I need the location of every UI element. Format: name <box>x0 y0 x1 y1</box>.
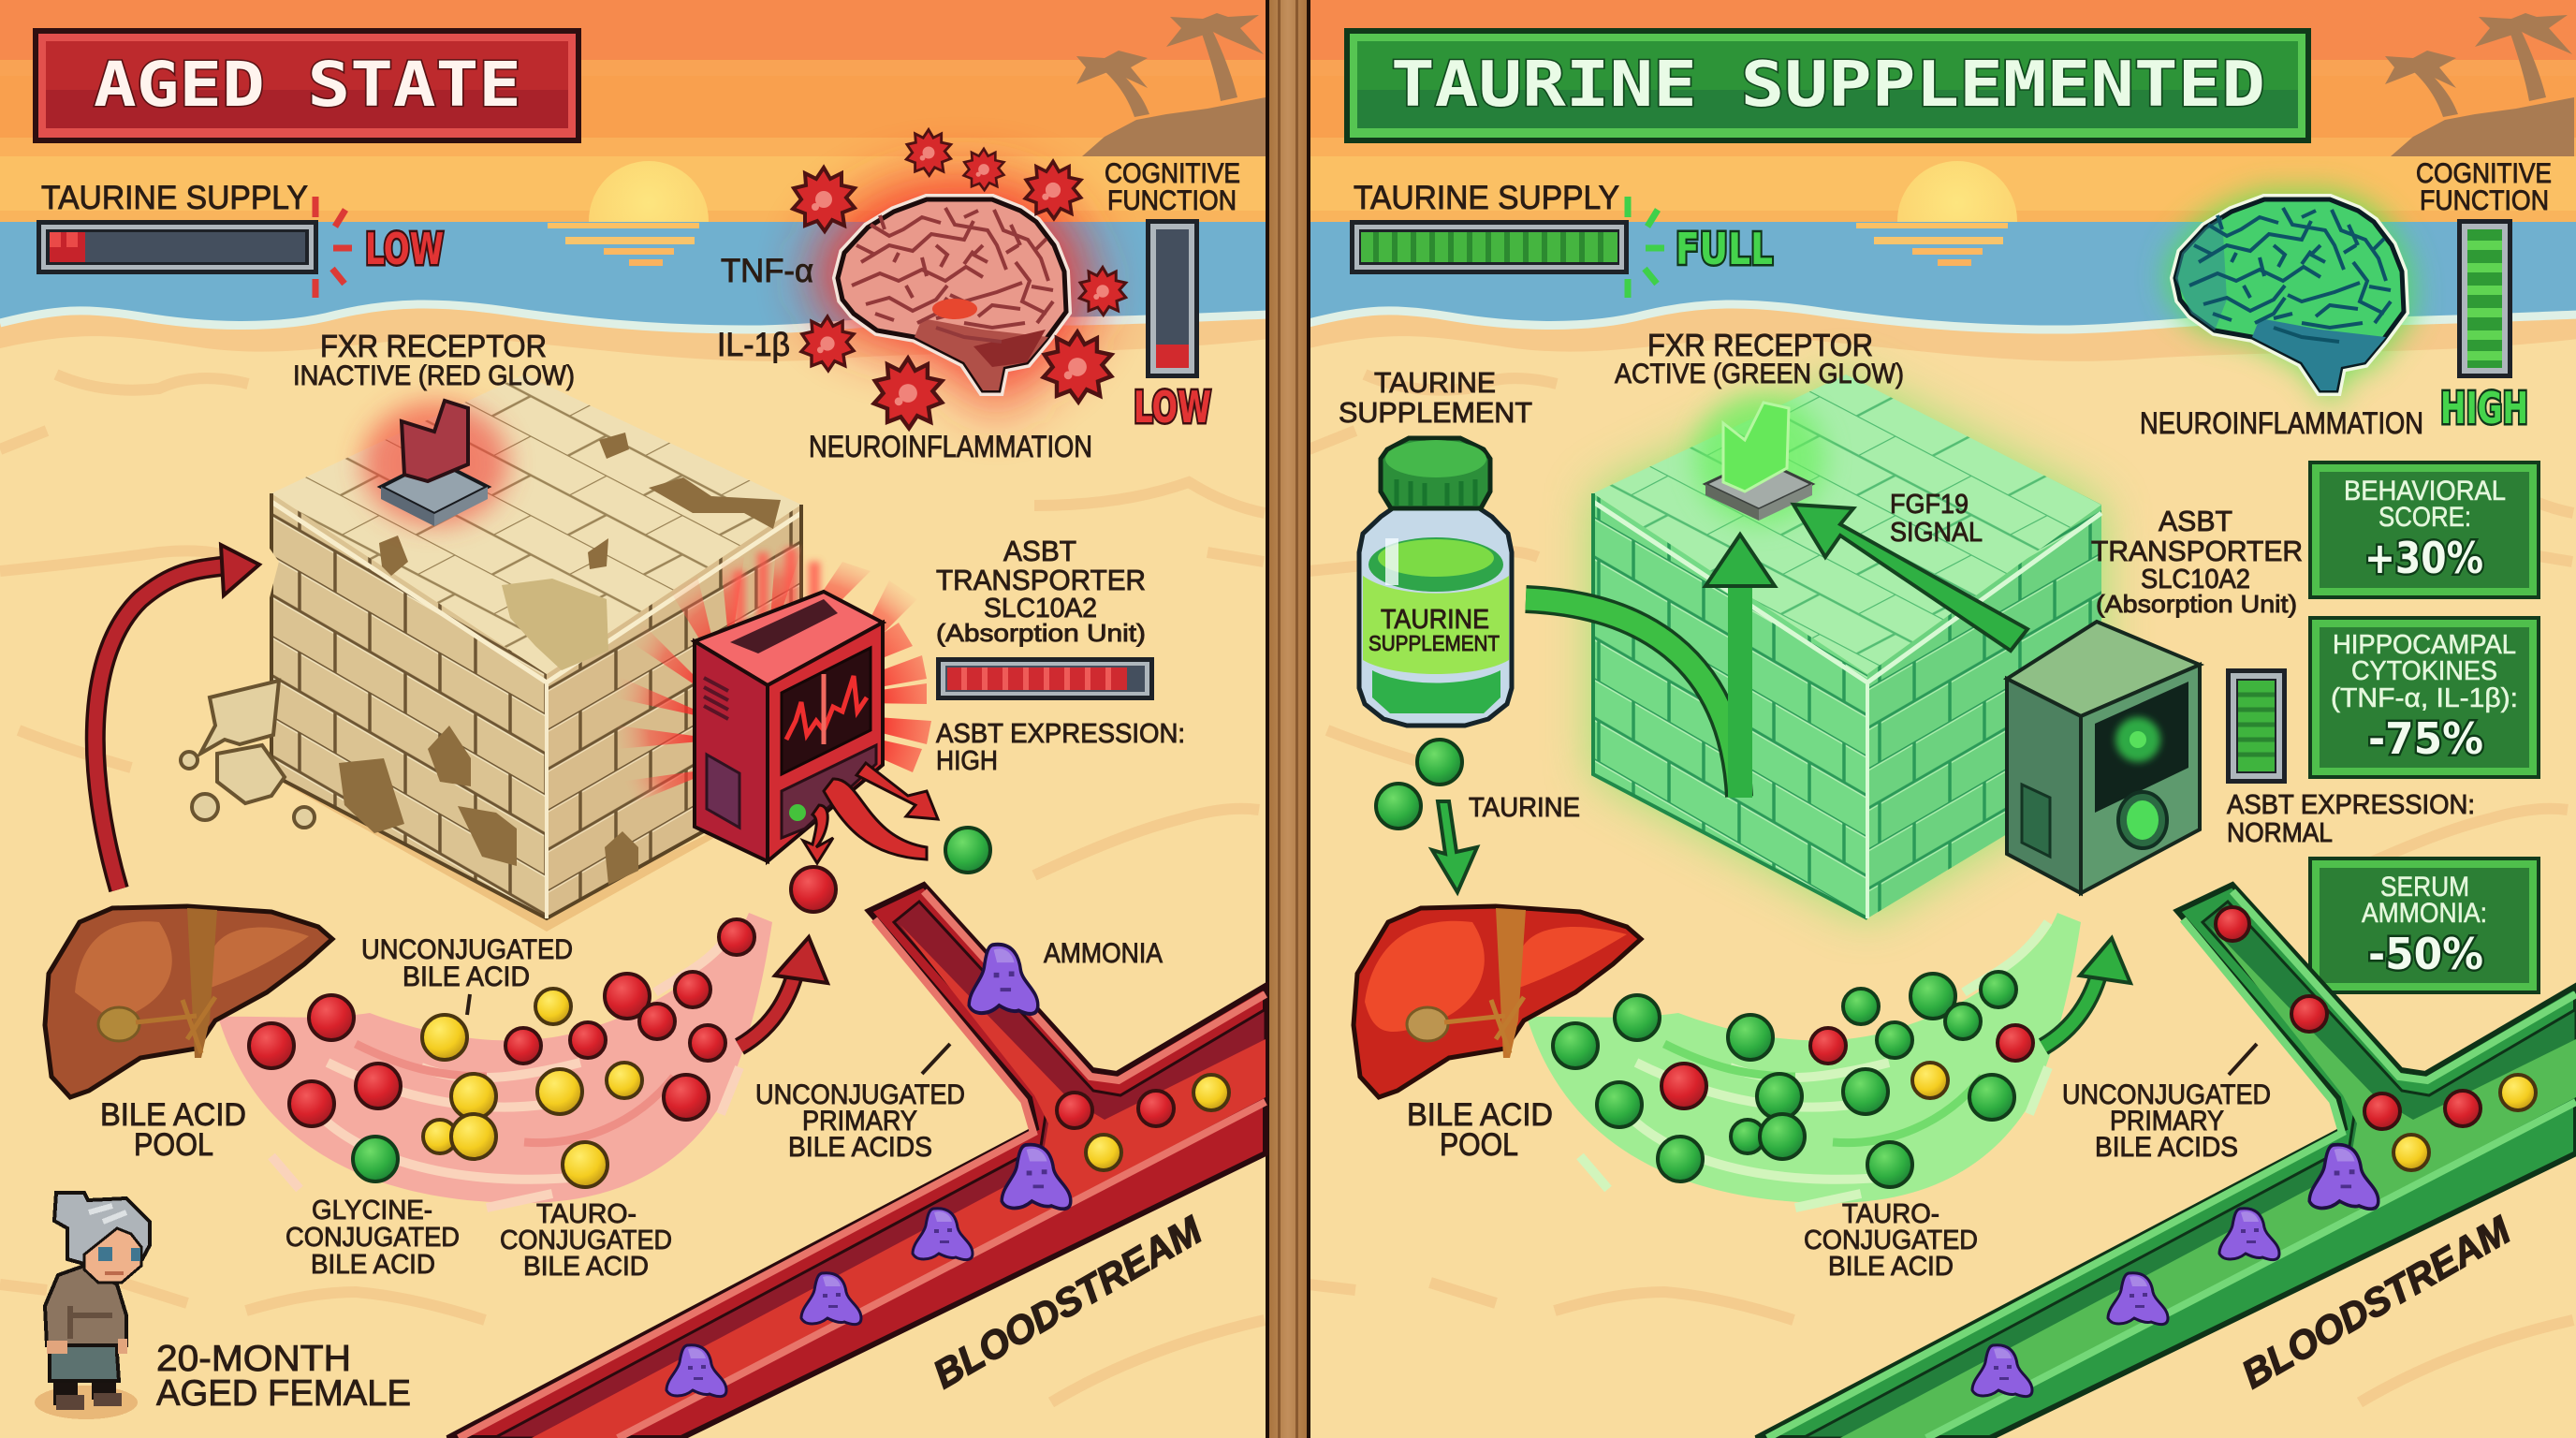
ASBT expression label <box>936 719 1185 776</box>
cognitive function label: FUNCTION <box>2420 185 2549 216</box>
FXR receptor label <box>1615 328 1904 389</box>
stat card: hippocampal cytokines: (TNF-α, IL-1β): <box>2331 683 2518 713</box>
ASBT transporter label: (Absorption Unit) <box>936 619 1146 647</box>
taurine supply gauge: low <box>37 220 318 274</box>
unconjugated primary bile acids label: UNCONJUGATED <box>755 1079 965 1110</box>
stat card: behavioral score: +30% <box>2364 533 2483 583</box>
aged female label: 20-MONTH <box>156 1339 351 1379</box>
neuroinflammation label: NEUROINFLAMMATION <box>809 430 1092 463</box>
ASBT transporter label: SLC10A2 <box>984 594 1097 624</box>
FGF19 signal label <box>1890 490 1983 548</box>
ASBT transporter label <box>936 535 1146 647</box>
ASBT expression label <box>2227 790 2475 848</box>
title banner: taurine supplemented: TAURINE SUPPLEMENTED <box>1391 48 2265 121</box>
ASBT transporter label <box>2091 505 2303 618</box>
cognitive function label: COGNITIVE <box>1105 158 1240 189</box>
bottle label text <box>1368 605 1500 655</box>
unconjugated bile acid label: UNCONJUGATED <box>361 934 573 965</box>
curved arrow toward transporter <box>739 937 827 1047</box>
tauro-conjugated label <box>500 1199 672 1282</box>
bile acid flow swoosh <box>218 913 772 1208</box>
cognitive function gauge: high <box>2457 219 2512 378</box>
bloodstream vessel red <box>447 885 1266 1438</box>
glycine-conjugated label: CONJUGATED <box>285 1223 460 1253</box>
high label: HIGH <box>2440 383 2528 433</box>
FXR receptor label: ACTIVE (GREEN GLOW) <box>1615 359 1904 389</box>
unconjugated primary bile acids label: UNCONJUGATED <box>2062 1079 2271 1110</box>
ASBT expression label: ASBT EXPRESSION: <box>936 719 1185 749</box>
arrow: liver to cube <box>95 545 259 889</box>
tauro-conjugated label <box>1804 1199 1978 1282</box>
panel: taurine supplemented <box>1339 28 2576 1438</box>
bile acid pool label: BILE ACID <box>1407 1097 1553 1133</box>
taurine supply gauge: full <box>1350 220 1629 274</box>
bloodstream vessel green <box>1756 885 2576 1438</box>
neuroinflammation label: NEUROINFLAMMATION <box>2140 406 2423 440</box>
tauro-conjugated label: BILE ACID <box>1828 1252 1954 1282</box>
unconjugated primary bile acids label <box>2062 1044 2271 1163</box>
ASBT transporter label: TRANSPORTER <box>936 564 1146 596</box>
taurine supplement label: TAURINE <box>1374 366 1496 399</box>
cognitive function label <box>1105 158 1240 216</box>
ASBT expression gauge: normal <box>2226 668 2287 784</box>
wooden divider <box>1266 0 1310 1438</box>
unconjugated primary bile acids label: BILE ACIDS <box>2095 1132 2238 1163</box>
stat card: serum ammonia: -50% <box>2368 929 2483 979</box>
bile acid pool label <box>1407 1097 1553 1163</box>
aged female label: AGED FEMALE <box>156 1373 411 1414</box>
title banner: aged state <box>33 28 581 143</box>
taurine supplement label <box>1339 366 1532 429</box>
bottle label text: SUPPLEMENT <box>1368 631 1500 655</box>
unconjugated primary bile acids label: BILE ACIDS <box>788 1132 932 1163</box>
unconjugated primary bile acids label: PRIMARY <box>2110 1106 2224 1137</box>
green healthy brain <box>2164 190 2415 400</box>
FGF19 diagonal arrow <box>1793 505 2027 651</box>
up arrow to FXR <box>1705 535 1775 798</box>
IL-1beta label: IL-1β <box>717 327 790 363</box>
crumbling brick cube <box>243 374 814 932</box>
ammonia and bile acids in vessel <box>666 945 1229 1397</box>
ASBT transporter device normal <box>2007 622 2200 893</box>
stat card: hippocampal cytokines: HIPPOCAMPAL <box>2333 630 2516 660</box>
liver healthy <box>1354 906 1641 1097</box>
bile acid pool label: POOL <box>1440 1127 1518 1163</box>
FXR receptor label <box>293 329 575 391</box>
unconjugated primary bile acids label: PRIMARY <box>802 1106 917 1137</box>
ASBT expression gauge: high <box>936 657 1154 700</box>
aged female label <box>156 1339 411 1414</box>
stat card: hippocampal cytokines: CYTOKINES <box>2351 656 2497 686</box>
ASBT transporter label: ASBT <box>1003 535 1076 567</box>
rubble <box>181 681 315 828</box>
cognitive function label <box>2416 158 2552 216</box>
ASBT expression label: ASBT EXPRESSION: <box>2227 790 2475 820</box>
taurine supplement bottle <box>1359 438 1512 726</box>
taurine molecules <box>1376 740 1462 829</box>
tauro-conjugated label: CONJUGATED <box>500 1225 672 1255</box>
title banner: aged state: AGED STATE <box>94 49 521 121</box>
unconjugated bile acid label: BILE ACID <box>402 961 530 992</box>
low label: LOW <box>365 224 444 274</box>
cognitive function label: FUNCTION <box>1107 185 1237 216</box>
FXR receptor active <box>1694 393 1825 524</box>
taurine supplement label: SUPPLEMENT <box>1339 396 1532 429</box>
taurine supply label: TAURINE SUPPLY <box>1354 180 1619 216</box>
ASBT transporter device with red alarm rays <box>613 534 938 863</box>
ASBT transporter label: ASBT <box>2159 505 2232 537</box>
FGF19 signal label: SIGNAL <box>1890 518 1983 548</box>
cognitive function gauge: low <box>1146 219 1199 378</box>
low cognitive label: LOW <box>1134 382 1211 433</box>
cognitive function label: COGNITIVE <box>2416 158 2552 189</box>
stat card: serum ammonia <box>2308 857 2540 994</box>
status ticks <box>1628 197 1664 298</box>
full label: FULL <box>1676 224 1773 274</box>
tauro-conjugated label: CONJUGATED <box>1804 1225 1978 1255</box>
stat card: behavioral score: BEHAVIORAL <box>2344 476 2506 506</box>
ammonia and bile acids in vessel <box>1972 907 2536 1397</box>
stat card: hippocampal cytokines <box>2308 616 2540 779</box>
FXR receptor label: FXR RECEPTOR <box>320 329 547 363</box>
tauro-conjugated label: TAURO- <box>536 1199 637 1229</box>
tauro-conjugated label: BILE ACID <box>523 1252 649 1282</box>
bottle label text: TAURINE <box>1381 605 1489 635</box>
ASBT expression label: HIGH <box>936 746 998 776</box>
stat card: serum ammonia: SERUM <box>2380 872 2469 902</box>
glycine-conjugated label: GLYCINE- <box>312 1196 432 1225</box>
title banner: taurine supplemented <box>1344 28 2311 143</box>
tauro-conjugated label: TAURO- <box>1842 1199 1939 1229</box>
red brain with inflammation glow <box>814 181 1089 409</box>
unconjugated primary bile acids label <box>755 1044 965 1163</box>
stat card: behavioral score <box>2308 461 2540 599</box>
unconjugated bile acid label <box>361 934 573 1015</box>
bile acid pool label: BILE ACID <box>100 1097 246 1133</box>
stat card: hippocampal cytokines: -75% <box>2368 713 2483 764</box>
stat card: behavioral score: SCORE: <box>2378 502 2471 533</box>
aged female character <box>35 1193 150 1419</box>
stat card: serum ammonia: AMMONIA: <box>2362 898 2487 929</box>
taurine supply label: TAURINE SUPPLY <box>41 180 308 216</box>
panel: aged state <box>33 28 1266 1438</box>
bloodstream label: BLOODSTREAM <box>926 1208 1209 1397</box>
FXR receptor label: INACTIVE (RED GLOW) <box>293 360 575 391</box>
alert ticks <box>315 197 352 298</box>
ASBT transporter label: SLC10A2 <box>2141 565 2250 594</box>
curved arrow: supplement to FXR <box>1526 599 1739 797</box>
FXR receptor label: FXR RECEPTOR <box>1647 328 1873 362</box>
ASBT expression label: NORMAL <box>2227 818 2333 848</box>
ASBT transporter label: TRANSPORTER <box>2091 535 2303 567</box>
ASBT transporter label: (Absorption Unit) <box>2096 590 2297 618</box>
bile acid pool label: POOL <box>134 1127 213 1163</box>
taurine label: TAURINE <box>1469 793 1580 823</box>
bile acid molecules green <box>1553 972 2033 1187</box>
bile acid pool label <box>100 1097 246 1163</box>
cytokine particles <box>793 130 1126 428</box>
glycine-conjugated label <box>285 1196 460 1280</box>
bile acid molecules <box>249 828 990 1187</box>
bloodstream label: BLOODSTREAM <box>2234 1208 2518 1397</box>
taurine down arrow <box>1432 801 1477 892</box>
FXR receptor inactive <box>362 401 508 526</box>
panel background: aged state beach scene <box>0 0 1269 1438</box>
TNF-alpha label: TNF-α <box>721 253 813 289</box>
panel background: taurine supplemented beach scene <box>1309 0 2576 1438</box>
glycine-conjugated label: BILE ACID <box>311 1250 435 1280</box>
liver <box>45 906 332 1097</box>
curved arrow toward transporter green <box>2043 938 2130 1047</box>
FGF19 signal label: FGF19 <box>1890 490 1969 520</box>
ammonia label: AMMONIA <box>1044 938 1163 969</box>
bile acid flow swoosh green <box>1527 913 2081 1208</box>
green brick cube with glow <box>1593 374 2101 918</box>
